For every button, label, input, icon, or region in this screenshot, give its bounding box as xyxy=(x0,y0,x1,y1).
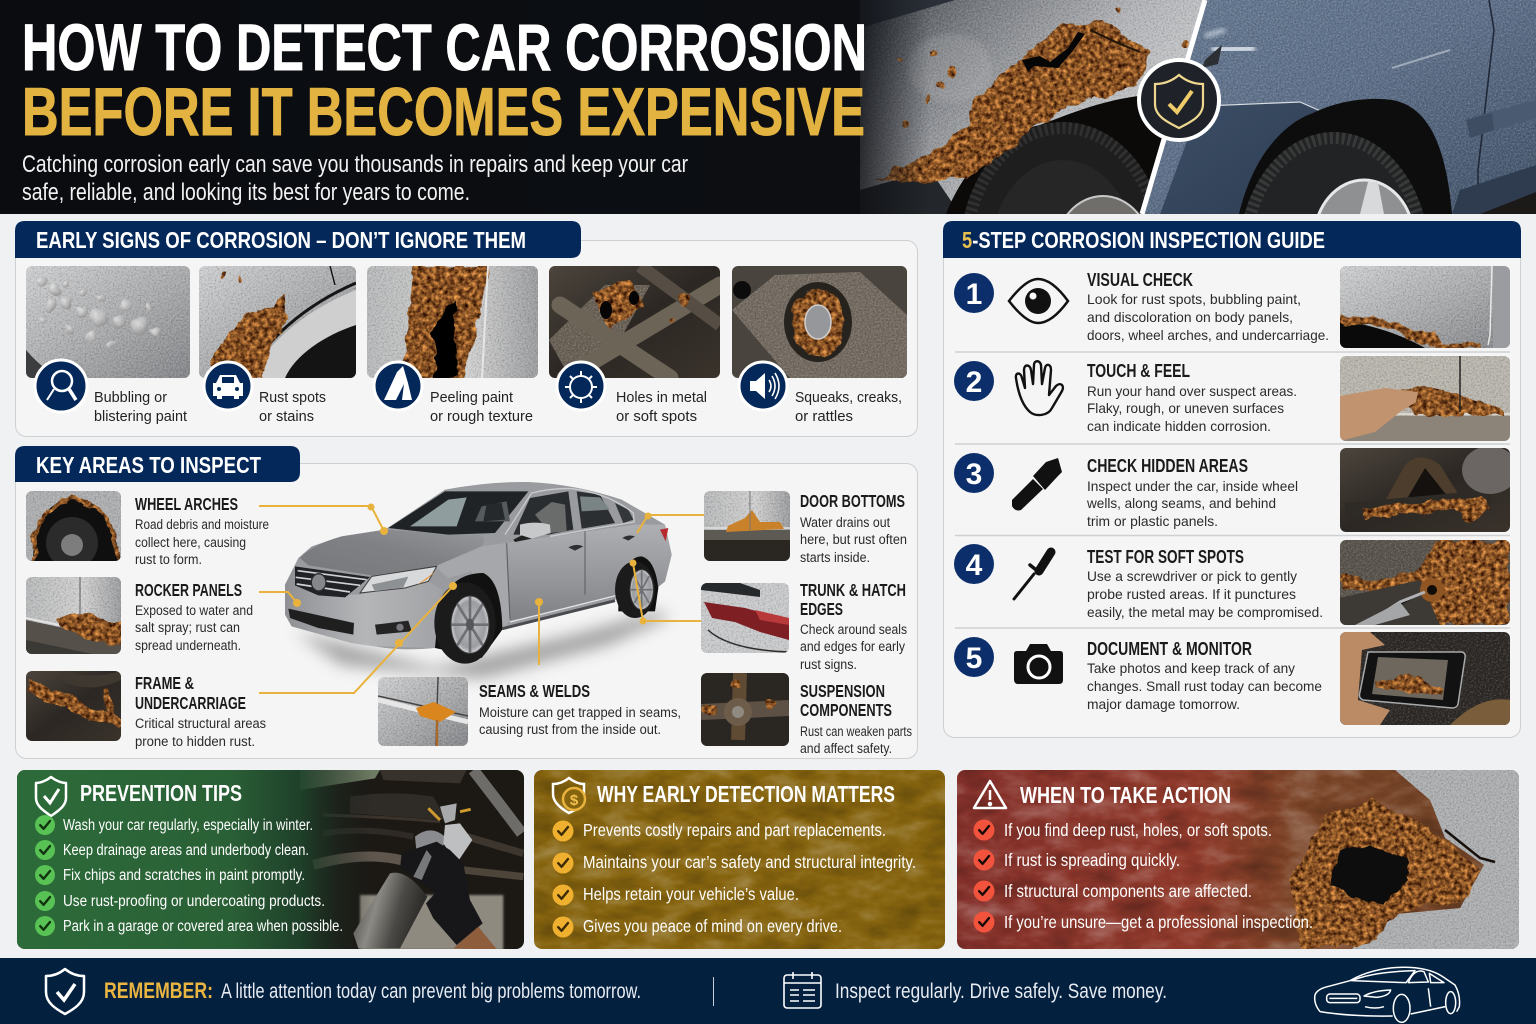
card: why early detection matters xyxy=(534,770,945,949)
text: causing rust from the inside out. xyxy=(479,722,661,737)
header photo: rusted fender xyxy=(860,0,1202,214)
icon: car outline xyxy=(1315,967,1460,1022)
text: doors, wheel arches, and undercarriage. xyxy=(1087,327,1329,343)
diagonal divider xyxy=(1142,0,1205,214)
text: Rust can weaken parts xyxy=(800,724,912,739)
icon: shield and coin: $ xyxy=(570,792,579,809)
panel heading: early signs xyxy=(15,221,581,258)
label: blistering paint xyxy=(94,408,188,425)
icon: flashlight xyxy=(1012,458,1062,510)
panel heading: guide xyxy=(943,221,1521,258)
sign: rust spots xyxy=(199,266,356,425)
title xyxy=(22,10,867,150)
text xyxy=(1086,455,1298,529)
illustration: silver sedan xyxy=(285,482,672,678)
photo xyxy=(1340,356,1510,441)
badge: shield check xyxy=(1139,60,1219,140)
sign: bubbling paint xyxy=(26,266,190,425)
text: and affect safety. xyxy=(800,741,892,756)
text: Look for rust spots, bubbling paint, xyxy=(1087,291,1301,307)
text: Take photos and keep track of any xyxy=(1087,660,1295,676)
label: Peeling paint xyxy=(430,389,514,406)
text: Check around seals xyxy=(800,622,907,637)
title: BEFORE IT BECOMES EXPENSIVE xyxy=(22,74,865,150)
text xyxy=(800,580,907,672)
reason list: Helps retain your vehicle’s value. xyxy=(583,884,799,904)
text xyxy=(1087,546,1323,620)
text: rust to form. xyxy=(135,552,202,567)
action list: If rust is spreading quickly. xyxy=(1004,850,1180,870)
text: Water drains out xyxy=(800,515,890,530)
text xyxy=(479,681,681,737)
number badge: 4 xyxy=(966,549,983,582)
text: here, but rust often xyxy=(800,532,907,547)
text: trim or plastic panels. xyxy=(1087,513,1218,529)
number badge xyxy=(954,637,994,677)
step 5: document and monitor xyxy=(954,632,1510,725)
reminder text xyxy=(104,978,641,1003)
text: DOOR BOTTOMS xyxy=(800,491,905,511)
icon: shield check xyxy=(36,777,66,816)
text xyxy=(135,494,269,567)
card: prevention tips xyxy=(17,770,524,950)
step 1: visual check xyxy=(954,266,1510,348)
action list: If you’re unsure—get a professional inspection. xyxy=(1004,912,1313,932)
panel heading: key areas: KEY AREAS TO INSPECT xyxy=(36,452,261,478)
label: Bubbling or xyxy=(94,389,167,406)
illustration: spray gun and glove xyxy=(353,803,497,950)
tip list: Use rust-proofing or undercoating products. xyxy=(63,893,325,910)
icon: calendar xyxy=(784,972,821,1008)
text: CHECK HIDDEN AREAS xyxy=(1087,455,1248,476)
number badge xyxy=(954,544,994,584)
text: Road debris and moisture xyxy=(135,517,269,532)
text: VISUAL CHECK xyxy=(1087,269,1193,290)
reminder text: REMEMBER: xyxy=(104,978,213,1003)
text: salt spray; rust can xyxy=(135,620,240,635)
text: Moisture can get trapped in seams, xyxy=(479,705,681,720)
sign: peeling paint xyxy=(367,266,538,425)
text xyxy=(135,673,266,749)
step 3: check hidden areas xyxy=(954,446,1518,532)
label: or rough texture xyxy=(430,408,533,425)
text: SEAMS & WELDS xyxy=(479,681,590,701)
connector lines: inspection points xyxy=(259,504,704,693)
icon: shield and coin xyxy=(553,778,585,813)
text: DOCUMENT & MONITOR xyxy=(1087,638,1252,659)
card: when to take action xyxy=(957,770,1519,949)
reason list: Gives you peace of mind on every drive. xyxy=(583,916,842,936)
text: spread underneath. xyxy=(135,638,241,653)
label: Squeaks, creaks, xyxy=(795,389,902,406)
area: frame and undercarriage xyxy=(26,671,266,749)
number badge xyxy=(954,453,994,493)
subtitle xyxy=(22,151,688,206)
label xyxy=(94,389,188,425)
icon: peeling paint xyxy=(374,362,422,410)
label: Rust spots xyxy=(259,389,326,406)
label xyxy=(259,389,326,425)
reason list xyxy=(552,820,916,938)
icon: shield check xyxy=(46,969,84,1014)
card title: WHY EARLY DETECTION MATTERS xyxy=(597,781,895,807)
label: or stains xyxy=(259,408,314,425)
header photo: clean blue fender xyxy=(1144,0,1536,214)
text: prone to hidden rust. xyxy=(135,734,255,749)
area: wheel arches xyxy=(26,491,269,569)
text: SUSPENSION xyxy=(800,681,885,701)
reason list: Prevents costly repairs and part replacements. xyxy=(583,820,886,840)
reason list: Maintains your car’s safety and structural integrity. xyxy=(583,852,916,872)
label: or soft spots xyxy=(616,408,697,425)
text: and discoloration on body panels, xyxy=(1087,309,1293,325)
number badge: 1 xyxy=(966,278,982,311)
reminder text: A little attention today can prevent big problems tomorrow. xyxy=(221,980,641,1003)
text: easily, the metal may be compromised. xyxy=(1087,604,1323,620)
panel heading: early signs: EARLY SIGNS OF CORROSION – DON’T IGNORE THEM xyxy=(36,227,526,253)
icon: screwdriver xyxy=(1014,552,1051,599)
text: Critical structural areas xyxy=(135,716,266,731)
text: wells, along seams, and behind xyxy=(1086,495,1276,511)
text: Flaky, rough, or uneven surfaces xyxy=(1087,400,1284,416)
text: ROCKER PANELS xyxy=(135,580,242,600)
header banner xyxy=(0,0,1536,214)
icon: speaker xyxy=(739,362,787,410)
subtitle: Catching corrosion early can save you thousands in repairs and keep your car xyxy=(22,151,688,178)
area: rocker panels xyxy=(26,577,253,660)
text xyxy=(135,580,253,653)
panel heading: guide: 5-STEP CORROSION INSPECTION GUIDE xyxy=(962,227,1325,253)
area: seams and welds xyxy=(378,677,681,746)
text: TEST FOR SOFT SPOTS xyxy=(1087,546,1244,567)
text xyxy=(1087,269,1329,343)
text xyxy=(800,491,907,565)
number badge xyxy=(954,273,994,313)
photo xyxy=(1340,266,1510,348)
label: Holes in metal xyxy=(616,389,707,406)
text: TOUCH & FEEL xyxy=(1087,360,1190,381)
text: collect here, causing xyxy=(135,535,246,550)
card title: PREVENTION TIPS xyxy=(80,780,242,806)
sign: squeaks xyxy=(732,266,907,425)
tip list: Park in a garage or covered area when possible. xyxy=(63,918,343,935)
text: Use a screwdriver or pick to gently xyxy=(1087,568,1297,584)
tip list: Wash your car regularly, especially in winter. xyxy=(63,817,313,834)
photo xyxy=(1340,540,1510,625)
footer bar xyxy=(0,958,1536,1024)
text: Run your hand over suspect areas. xyxy=(1087,383,1297,399)
number badge: 5 xyxy=(966,642,982,675)
text: TRUNK & HATCH xyxy=(800,580,906,600)
icon: camera xyxy=(1014,644,1063,684)
label xyxy=(430,389,533,425)
card title: WHEN TO TAKE ACTION xyxy=(1020,782,1231,808)
title: HOW TO DETECT CAR CORROSION xyxy=(22,10,867,84)
icon: car front xyxy=(204,362,252,410)
tip list: Fix chips and scratches in paint promptly. xyxy=(63,867,305,884)
number badge xyxy=(954,361,994,401)
icon: gear xyxy=(557,362,605,410)
icon: eye xyxy=(1009,279,1068,323)
action list xyxy=(974,820,1313,932)
photo backdrop: undercarriage xyxy=(300,770,523,950)
tip list xyxy=(35,815,343,936)
text: rust signs. xyxy=(800,657,857,672)
label: or rattles xyxy=(795,408,853,425)
panel heading: key areas xyxy=(15,446,300,482)
text xyxy=(1087,638,1322,712)
label xyxy=(616,389,707,425)
step 4: test for soft spots xyxy=(954,540,1510,625)
panel: 5-step inspection guide xyxy=(943,221,1521,738)
step 2: touch and feel xyxy=(954,356,1510,441)
icon: warning triangle xyxy=(974,781,1006,808)
sign: holes in metal xyxy=(549,266,720,425)
area: suspension components xyxy=(701,673,912,756)
text: and edges for early xyxy=(800,639,905,654)
icon: magnifier xyxy=(35,360,87,412)
icon: hand xyxy=(1016,361,1063,415)
text: can indicate hidden corrosion. xyxy=(1087,418,1271,434)
panel: early signs of corrosion xyxy=(15,221,918,436)
number badge: 2 xyxy=(966,366,982,399)
action list: If structural components are affected. xyxy=(1004,881,1252,901)
text: Inspect under the car, inside wheel xyxy=(1087,478,1298,494)
tip list: Keep drainage areas and underbody clean. xyxy=(63,842,309,859)
tagline: Inspect regularly. Drive safely. Save money. xyxy=(835,980,1167,1003)
subtitle: safe, reliable, and looking its best for years to come. xyxy=(22,179,470,206)
number badge: 3 xyxy=(966,458,982,491)
text: major damage tomorrow. xyxy=(1087,696,1240,712)
text xyxy=(1087,360,1297,434)
text: starts inside. xyxy=(800,550,870,565)
text: FRAME & xyxy=(135,673,194,693)
area: trunk and hatch edges xyxy=(701,580,907,672)
area: door bottoms xyxy=(704,491,907,565)
text: UNDERCARRIAGE xyxy=(135,693,246,713)
text: COMPONENTS xyxy=(800,700,892,720)
text: Exposed to water and xyxy=(135,603,253,618)
photo xyxy=(1340,632,1510,725)
photo xyxy=(1340,446,1518,532)
text: changes. Small rust today can become xyxy=(1087,678,1322,694)
panel: key areas to inspect xyxy=(15,446,918,758)
action list: If you find deep rust, holes, or soft spots. xyxy=(1004,820,1272,840)
text xyxy=(800,681,912,756)
text: WHEEL ARCHES xyxy=(135,494,238,514)
label xyxy=(795,389,902,425)
text: EDGES xyxy=(800,599,843,619)
text: probe rusted areas. If it punctures xyxy=(1087,586,1296,602)
